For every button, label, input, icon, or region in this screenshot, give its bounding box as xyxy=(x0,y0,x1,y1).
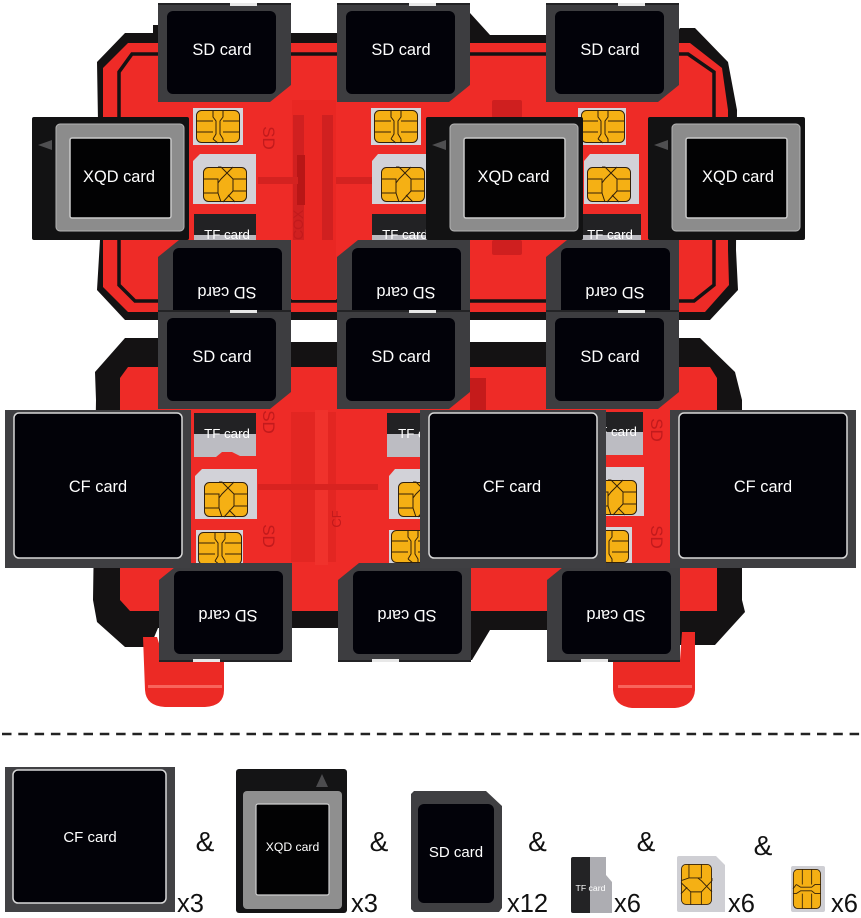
red latch: right xyxy=(613,632,695,708)
micro SIM icon xyxy=(677,856,725,912)
SD card row 2 column 3: SD card xyxy=(585,283,645,301)
SD card row 3 column 2 xyxy=(337,310,470,409)
nano SIM xyxy=(193,108,243,145)
XQD card 3 xyxy=(648,117,805,240)
TF card: TF card xyxy=(382,227,428,242)
CF card 2: CF card xyxy=(483,478,541,496)
SD card row 3 column 1 xyxy=(158,310,291,409)
SD card row 2 column 1: SD card xyxy=(197,283,257,301)
micro SIM xyxy=(590,467,644,516)
SD card row 1 column 1: SD card xyxy=(192,41,252,59)
count x6: x6 xyxy=(831,890,858,918)
XQD card icon xyxy=(236,769,347,913)
TF card: TF card xyxy=(587,227,633,242)
TF card icon: TF card xyxy=(576,883,606,893)
SD card row 2 column 2 xyxy=(337,240,470,339)
slots: top case column 1 xyxy=(193,108,256,242)
nano SIM xyxy=(371,108,421,145)
centre rib: left xyxy=(258,100,376,300)
SD card row 4 column 2: SD card xyxy=(377,606,437,624)
TF card: TF card xyxy=(398,426,444,441)
SD card row 1 column 3 xyxy=(546,3,679,102)
SD card row 4 column 2 xyxy=(338,563,471,662)
XQD card icon: XQD card xyxy=(266,840,319,854)
SD card row 3 column 1: SD card xyxy=(192,348,252,366)
CF card 2 xyxy=(420,410,606,568)
SD card row 4 column 3: SD card xyxy=(586,606,646,624)
micro SIM xyxy=(193,154,256,204)
ampersand: & xyxy=(528,826,547,857)
micro SIM xyxy=(584,154,639,204)
CF card 3 xyxy=(670,410,856,568)
XQD card 1: XQD card xyxy=(83,168,155,186)
embossed mark: SD right lower: SD xyxy=(647,525,666,549)
slots: bottom case column 2 xyxy=(387,413,444,565)
nano SIM xyxy=(578,108,626,145)
SD card row 4 column 1: SD card xyxy=(198,606,258,624)
SD card row 1 column 1 xyxy=(158,3,291,102)
SD card row 4 column 3 xyxy=(547,563,680,662)
slots: bottom case column 1 xyxy=(194,413,257,565)
XQD card 2: XQD card xyxy=(478,168,549,186)
TF card xyxy=(387,413,444,457)
count x12: x12 xyxy=(507,890,548,918)
SD card row 1 column 2 xyxy=(337,3,470,102)
CF card 1: CF card xyxy=(69,478,127,496)
red latch: left xyxy=(143,637,224,707)
legend: TF card x6 xyxy=(571,857,641,918)
embossed mark: brand: COX xyxy=(290,209,306,240)
SD card row 3 column 3: SD card xyxy=(580,348,640,366)
embossed mark: SD upper: SD xyxy=(259,410,278,434)
TF card xyxy=(194,413,256,457)
SD card icon: SD card xyxy=(429,844,483,861)
CF card 3: CF card xyxy=(734,478,792,496)
TF card: TF card xyxy=(591,424,637,439)
micro SIM xyxy=(372,154,434,204)
SD card row 3 column 3 xyxy=(546,310,679,409)
count x6: x6 xyxy=(614,890,641,918)
CF card icon xyxy=(5,767,175,912)
SD card row 1 column 2: SD card xyxy=(371,41,431,59)
nano SIM xyxy=(585,527,632,563)
XQD card 2 xyxy=(426,117,583,240)
CF card 1 xyxy=(5,410,191,568)
legend: micro SIM x6 xyxy=(677,856,755,918)
ampersand: & xyxy=(370,826,389,857)
XQD card 1 xyxy=(32,117,189,240)
embossed mark: SD: SD xyxy=(259,126,278,150)
count x3: x3 xyxy=(351,890,378,918)
SD card row 2 column 2: SD card xyxy=(376,283,436,301)
nano SIM xyxy=(389,530,436,565)
count x3: x3 xyxy=(177,890,204,918)
nano SIM xyxy=(196,530,243,565)
embossed mark: CF: CF xyxy=(329,510,344,528)
micro SIM xyxy=(195,469,257,519)
SD card row 4 column 1 xyxy=(159,563,292,662)
slots: top case column 3 xyxy=(578,108,641,242)
count x6: x6 xyxy=(728,890,755,918)
slots: top case column 2 xyxy=(371,108,434,242)
slots: bottom case column 3 xyxy=(585,412,644,563)
SD card row 3 column 2: SD card xyxy=(371,348,431,366)
embossed mark: SD right upper: SD xyxy=(647,418,666,442)
embossed mark: SD lower: SD xyxy=(259,524,278,548)
ampersand: & xyxy=(754,830,773,861)
legend: nano SIM x6 xyxy=(791,866,858,918)
panel: bottom case xyxy=(93,338,745,660)
SD card row 2 column 3 xyxy=(546,240,679,339)
XQD card 3: XQD card xyxy=(702,168,774,186)
legend: XQD card x3 xyxy=(236,769,378,918)
ampersand: & xyxy=(637,826,656,857)
SD card row 2 column 1 xyxy=(158,240,291,339)
CF card icon: CF card xyxy=(63,829,117,846)
ampersand: & xyxy=(196,826,215,857)
legend: CF card x3 xyxy=(5,767,204,918)
centre rib: right xyxy=(492,100,522,255)
TF card: TF card xyxy=(204,426,250,441)
legend: SD card x12 xyxy=(411,791,548,918)
SD card row 1 column 3: SD card xyxy=(580,41,640,59)
panel: top case xyxy=(97,13,738,320)
TF card: TF card xyxy=(204,227,250,242)
micro SIM xyxy=(389,469,442,519)
nano SIM icon xyxy=(791,866,825,912)
divider: dashed line xyxy=(2,733,860,735)
TF card xyxy=(590,412,643,455)
